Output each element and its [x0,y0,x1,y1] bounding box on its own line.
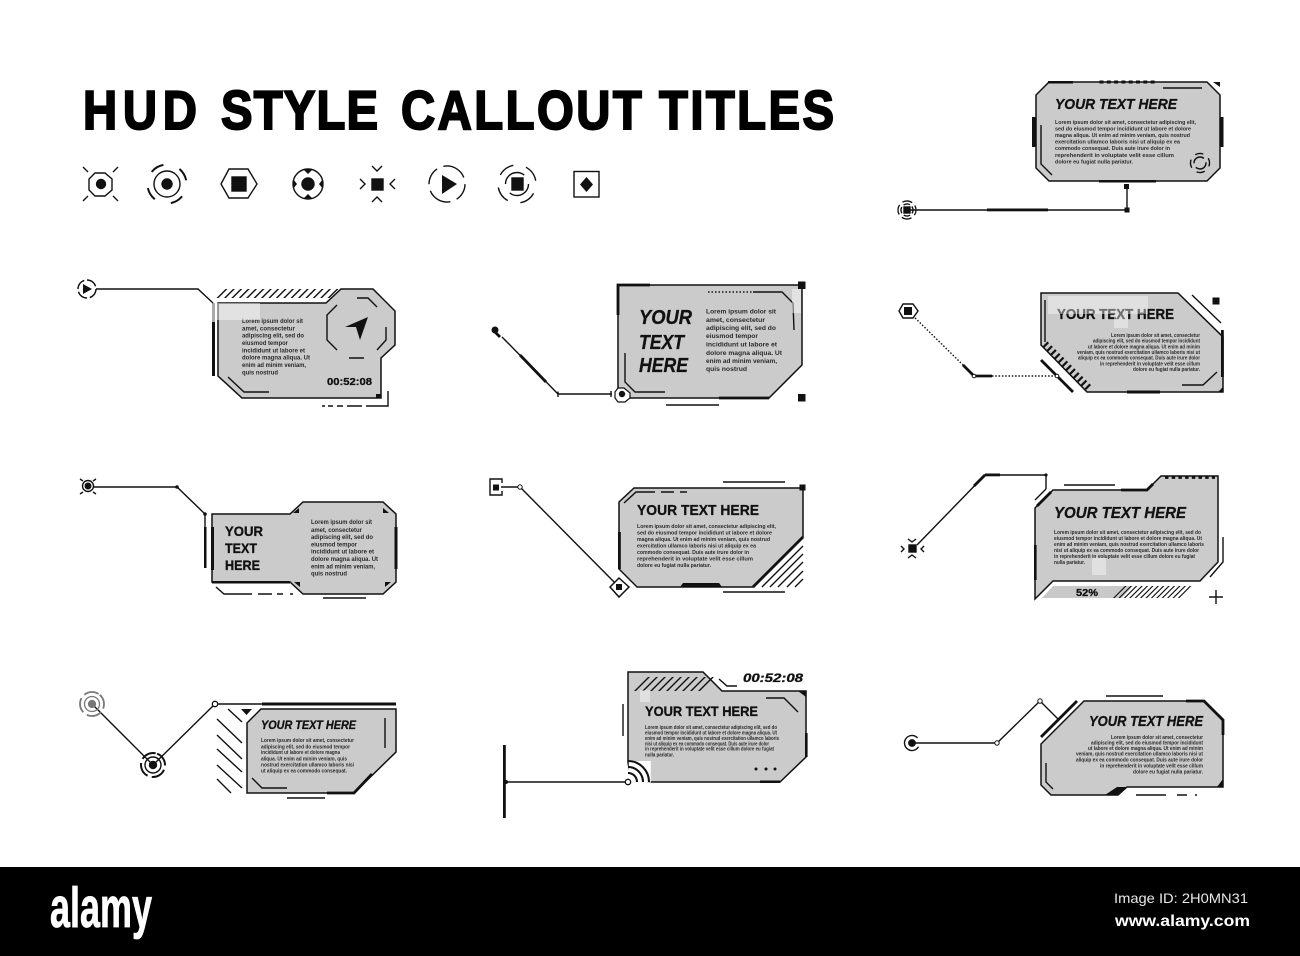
body text: in reprehenderit in voluptate velit esse cillum [1100,361,1201,367]
body text: quis nostrud [706,366,747,373]
heading [225,523,263,573]
accents [212,303,388,406]
body text: nostrud exercitation ullamco laboris nisi [261,762,354,768]
footer banner [0,867,1300,956]
icon: target chevrons [901,539,924,558]
callout: bottom right [902,696,1223,795]
body text: adipiscing elit, sed do eiusmod tempor incididunt [1093,339,1200,345]
corner triangles [293,508,391,587]
connector [907,184,1130,212]
corner squares [798,282,806,402]
frame accents [1032,81,1224,182]
body text: Lorem ipsum dolor sit amet, consectetur adipiscing elit, [1055,120,1196,126]
accents [623,679,808,783]
body text: aliquip ex ea commodo consequat. Duis aute irure dolor [1076,758,1203,764]
icon: circle with notches [293,169,323,199]
body text: amet, consectetur [242,326,296,332]
panel shape [619,488,803,587]
panel shape [212,502,396,594]
body text: nisi ut aliquip ex ea commodo consequat. Duis aute irure dolor [645,741,769,747]
icon: framed diamond [574,172,599,197]
title: STYLE [221,80,378,141]
alamy logo: alamy [50,876,152,940]
body text: Lorem ipsum dolor sit amet, consectetur adipiscing elit, sed do [1054,530,1202,536]
body text: eiusmod tempor [242,341,289,347]
body text [637,524,776,569]
inner lines [1041,88,1202,175]
body text: Lorem ipsum dolor sit amet, consectetur [1111,333,1200,339]
icon: hexagon [899,304,918,318]
body text: enim ad minim veniam, [311,564,375,570]
heading: TEXT [639,332,686,354]
body text: Lorem ipsum dolor sit amet, consectetur [1111,735,1203,741]
icon: anchor ring [895,198,919,222]
body text: adipiscing elit, sed do [311,535,373,541]
icon: hexagon square [221,169,257,198]
banner background [0,867,1300,956]
body text: adipiscing elit, sed do [706,325,776,332]
icon: play anchor [78,280,96,298]
watermark trace [1092,558,1106,575]
progress hatch [1119,586,1189,598]
body text: in reprehenderit in voluptate velit esse cillum dolore eu fugiat [1054,554,1195,560]
body text: amet, consectetur [706,317,765,324]
heading: HERE [225,557,260,573]
body text: Lorem ipsum dolor sit [706,308,777,316]
panel shape [618,285,802,398]
icon row [83,157,599,211]
body text [706,308,783,373]
callout: hatch corner [490,479,806,597]
body text: reprehenderit in voluptate velit esse cillum [637,556,753,562]
body text [242,319,310,376]
callout: YOUR TEXT HERE with tab [80,479,398,598]
image id: Image ID: 2H0MN31 [1114,890,1248,906]
icon: node [615,388,630,402]
connector [96,289,213,303]
body text: eiusmod tempor [706,333,758,340]
pointer triangle [241,709,252,715]
body text: ut labore et dolore magna aliqua. Ut enim ad minim [1088,746,1204,752]
body text: commodo consequat. Duis aute irure dolor in [637,550,749,556]
heading: YOUR TEXT HERE [261,720,356,732]
thick accents [1127,298,1224,394]
panel shape [1041,293,1223,392]
body text: dolore eu fugiat nulla pariatur. [637,563,711,569]
body text: incididunt ut labore et [311,550,374,556]
body text: enim ad minim veniam, [706,358,777,365]
body text: enim ad minim veniam, quis nostrud exercitation ullamco laboris [1054,542,1204,548]
body text: nulla pariatur. [645,752,675,758]
icon: diamond [610,578,629,597]
panel shape [1035,476,1218,599]
title: HUD [83,80,197,141]
inner and outer lines [1045,295,1221,385]
body text: reprehenderit in voluptate velit esse cillum [1055,153,1174,159]
heading: YOUR TEXT HERE [1089,713,1204,730]
icon: square with chevrons [360,166,395,202]
body text: veniam, quis nostrud exercitation ullamco laboris nisi ut [1076,752,1203,758]
panel shape [247,709,396,793]
callout: top right [895,81,1224,222]
icon: small ring [1187,150,1213,176]
icon: signal arcs [628,761,651,782]
body text [1055,120,1196,165]
body text: eiusmod tempor incididunt ut labore et dolore magna aliqua. Ut [1054,536,1202,542]
thick accents [204,527,398,584]
body text: Lorem ipsum dolor sit [242,319,303,325]
body text: exercitation ullamco laboris nisi ut aliquip ex ea [637,544,757,550]
watermark trace [640,690,650,702]
body text: dolore magna aliqua. Ut [706,350,783,357]
body text: incididunt ut labore et [242,348,305,354]
icon: ringed dot [140,157,194,211]
body text: in reprehenderit in voluptate velit esse cillum dolore eu fugiat [645,747,774,753]
connector [912,699,1058,745]
body text: aliquip ex ea commodo consequat. Duis aute irure dolor [1078,356,1200,362]
title: CALLOUT [401,80,642,141]
heading: YOUR TEXT HERE [637,502,759,519]
body text: adipiscing elit, sed do [242,334,304,340]
body text: eiusmod tempor incididunt ut labore et dolore magna aliqua. Ut [645,731,777,737]
body text: eiusmod tempor [311,542,358,548]
body text: enim ad minim veniam, quis nostrud exercitation ullamco laboris [645,736,779,742]
body text [261,738,354,774]
time: 00:52:08 [327,376,372,388]
heading [639,307,692,377]
body text: veniam, quis nostrud exercitation ullamco laboris nisi ut [1077,350,1200,356]
body text: adipiscing elit, sed do eiusmod tempor [261,744,350,750]
body text: dolore eu fugiat nulla pariatur. [1055,159,1133,165]
connector [492,326,612,397]
heading: YOUR [639,307,692,329]
body text: adipiscing elit, sed do eiusmod tempor incididunt [1091,740,1203,746]
connector [94,485,207,527]
top rule [217,702,396,706]
body text: magna aliqua. Ut enim ad minim veniam, quis nostrud [1055,133,1190,139]
body text: dolore magna aliqua. Ut [311,557,378,563]
callout: arrow and timer [78,280,395,406]
watermark trace [1048,296,1148,328]
body text: Lorem ipsum dolor sit amet, consectetur adipiscing elit, [637,524,776,530]
body text: nisi ut aliquip ex ea commodo consequat. Duis aute irure dolor [1054,548,1200,554]
connector [908,311,1059,378]
body text: quis nostrud [311,572,347,578]
heading: YOUR [225,523,263,539]
body text: exercitation ullamco laboris nisi ut aliquip ex ea [1055,140,1181,146]
accents [1041,696,1223,795]
icon: octagon target [83,167,118,201]
left hatch [217,709,242,793]
body text [311,520,378,578]
panel shape [218,289,395,398]
panel shape [1041,701,1223,795]
callout: left hatch panel [75,687,396,798]
icon: plus marker [1209,590,1223,604]
inner accents [252,718,385,798]
body text: aliqua. Ut enim ad minim veniam, quis [261,756,347,762]
body text: enim ad minim veniam, [242,363,306,369]
heading: HERE [639,355,689,377]
body text: dolore eu fugiat nulla pariatur. [1133,367,1201,373]
icon: bracket square [490,479,522,495]
body text: ut aliquip ex ea commodo consequat. [261,768,347,774]
lower lines [216,587,366,598]
body text: nulla pariatur. [1054,560,1085,566]
body text [1077,333,1201,373]
heading: YOUR TEXT HERE [645,703,758,719]
callout: YOUR TEXT HERE three lines tall [492,282,806,405]
watermark trace [215,303,260,320]
body text: incididunt ut labore et dolore magna [261,750,340,756]
body text [1076,735,1204,775]
thick accents [618,285,769,398]
watermark trace [792,289,801,313]
callout: tab and signal [503,672,808,818]
inner accents [625,292,794,405]
progress value: 52% [1076,588,1098,599]
connector [917,473,1048,545]
chamfer hatch [1045,344,1090,389]
icon: square with arcs [491,158,543,210]
connector [503,745,631,818]
body text: quis nostrud [242,370,278,376]
body text: ut labore et dolore magna aliqua. Ut enim ad minim [1088,344,1200,350]
time: 00:52:08 [743,673,804,685]
heading: TEXT [225,540,257,556]
title: TITLES [659,80,834,141]
connector [501,487,619,587]
body text [645,725,779,758]
body text: dolore magna aliqua. Ut [242,356,310,362]
icon: grey target [75,687,109,721]
website: www.alamy.com [1114,913,1250,930]
panel shape [1036,82,1220,181]
body text: sed do eiusmod tempor incididunt ut labore et dolore [637,531,772,537]
accents [618,482,806,592]
heading: YOUR TEXT HERE [1055,96,1178,113]
body text [1054,530,1204,566]
body text: Lorem ipsum dolor sit amet, consectetur adipiscing elit, sed do [645,725,777,731]
accents [1034,478,1223,580]
title [83,80,834,141]
icon: black target [138,750,168,780]
body text: dolore eu fugiat nulla pariatur. [1133,769,1204,775]
callout: progress panel [901,473,1223,604]
icon: play button [426,163,468,205]
connector [92,701,218,765]
icon: target [80,479,96,494]
callout: right aligned with chamfer hatch [899,293,1224,394]
body text: Lorem ipsum dolor sit amet, consectetur [261,738,354,744]
icon: C target [902,733,922,753]
tab hatch [641,677,713,691]
body text: Lorem ipsum dolor sit [311,520,372,526]
body text: incididunt ut labore et [706,342,778,348]
hatch [762,546,803,587]
heading: YOUR TEXT HERE [1054,505,1187,522]
panel shape [628,672,806,782]
inner octagon [327,298,386,358]
body text: sed do eiusmod tempor incididunt ut labore et dolore [1055,126,1191,132]
body text: magna aliqua. Ut enim ad minim veniam, quis nostrud [637,537,770,543]
body text: in reprehenderit in voluptate velit esse cillum [1100,764,1204,770]
dots [754,768,776,770]
hatch [221,289,335,298]
body text: commodo consequat. Duis aute irure dolor in [1055,146,1170,152]
progress band [1042,586,1133,598]
heading: YOUR TEXT HERE [1057,307,1174,323]
body text: amet, consectetur [311,528,363,534]
